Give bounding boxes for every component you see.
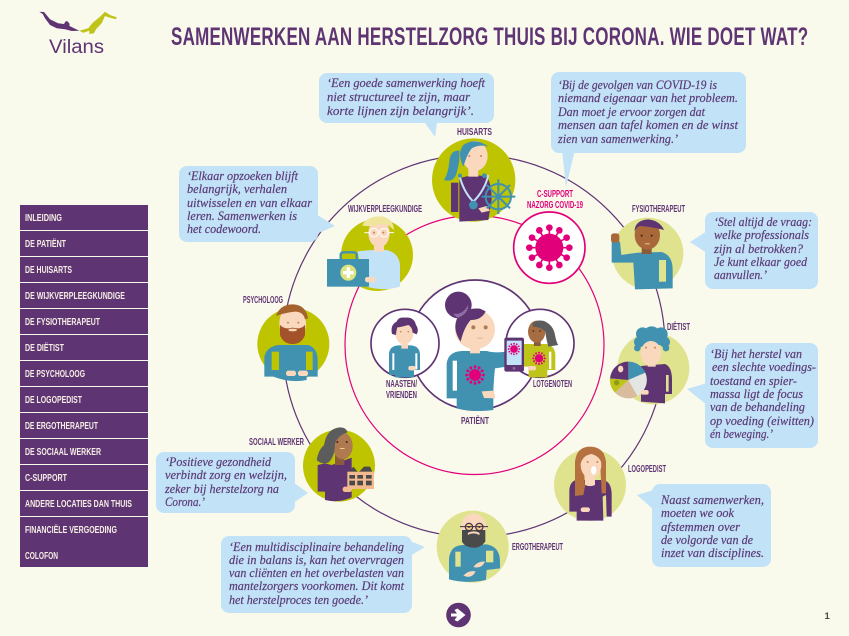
label: fysiotherapeut: FYSIOTHERAPEUT [632, 203, 685, 215]
figure: wijkverpleegkundige [327, 216, 413, 291]
callout: logopedist quote: Naast samenwerken, [660, 492, 764, 507]
page number: 1 [824, 611, 830, 622]
label: c-support [527, 188, 583, 211]
callout: fysiotherapeut quote: aanvullen.’ [714, 267, 767, 282]
callout: logopedist quote [637, 484, 771, 567]
callout: diëtist quote: massa ligt de focus [710, 386, 803, 401]
label: logopedist: LOGOPEDIST [628, 463, 666, 475]
icon: building [347, 467, 374, 489]
navigation menu: DE SOCIAAL WERKER [25, 446, 101, 458]
callout: huisarts quote: ‘Een goede samenwerking hoeft [327, 75, 485, 90]
callout: ergotherapeut quote: ‘Een multidisciplinaire behandeling [229, 539, 404, 554]
label: c-support: C-SUPPORT [537, 188, 573, 200]
callout: diëtist quote: én beweging.’ [710, 426, 773, 441]
callout: c-support quote [551, 72, 746, 187]
navigation menu: DE FYSIOTHERAPEUT [25, 316, 100, 328]
label: psycholoog: PSYCHOLOOG [243, 294, 283, 306]
callout: ergotherapeut quote: van cliënten en het overbelasten van [229, 565, 404, 580]
patient circle [410, 280, 540, 410]
label: patiënt: PATIËNT [461, 414, 489, 427]
callout: ergotherapeut quote [221, 536, 425, 613]
callout: fysiotherapeut quote: welke professionals [714, 227, 809, 242]
figure: lotgenoot [524, 321, 558, 377]
callout: wijkverpleegkundige quote: leren. Samenwerken is [187, 208, 297, 223]
navigation menu: FINANCIËLE VERGOEDING [25, 523, 117, 536]
callout: ergotherapeut quote: het herstelproces ten goede.’ [229, 592, 368, 607]
chart: pie [610, 362, 647, 398]
navigation menu: DE DIËTIST [25, 341, 64, 354]
label: ergotherapeut: ERGOTHERAPEUT [512, 541, 563, 553]
label: lotgenoten: LOTGENOTEN [533, 378, 572, 390]
callout: logopedist quote: afstemmen over [661, 519, 741, 534]
navigation menu [20, 205, 148, 567]
logo: Vilans: Vilans [49, 37, 104, 58]
navigation menu: DE WIJKVERPLEEGKUNDIGE [25, 290, 125, 302]
callout: ergotherapeut quote: mantelzorgers voorkomen. Dit komt [229, 578, 404, 593]
callout: huisarts quote: niet structureel te zijn, maar [327, 89, 471, 104]
navigation menu: C-SUPPORT [25, 472, 67, 484]
callout: logopedist quote: de volgorde van de [661, 532, 753, 547]
callout: ergotherapeut quote: die in balans is, kan het overvragen [229, 552, 404, 567]
label: sociaal werker: SOCIAAL WERKER [249, 436, 304, 448]
callout: wijkverpleegkundige quote: uitwisselen en van elkaar [187, 195, 313, 210]
callout: logopedist quote: inzet van disciplines. [661, 545, 764, 560]
lotgenoten circle [506, 309, 574, 377]
callout: diëtist quote: ‘Bij het herstel van [710, 346, 802, 361]
callout: diëtist quote: een slechte voedings- [712, 359, 816, 374]
label: c-support: NAZORG COVID-19 [527, 199, 583, 211]
callout: sociaal werker quote: verbindt zorg en welzijn, [165, 467, 287, 482]
callout: c-support quote: Dan moet je ervoor zorgen dat [557, 104, 705, 119]
label: naasten/vrienden: NAASTEN/ [386, 378, 417, 390]
callout: sociaal werker quote: ‘Positieve gezondheid [165, 454, 271, 469]
callout: huisarts quote [319, 73, 494, 137]
figure: ergotherapeut [437, 511, 509, 583]
callout: wijkverpleegkundige quote: ‘Elkaar opzoeken blijft [187, 168, 298, 183]
label: naasten/vrienden [386, 378, 417, 401]
callout: diëtist quote: toestand en spier- [710, 373, 797, 388]
navigation menu: INLEIDING [25, 212, 62, 224]
inner ring [345, 216, 604, 474]
callout: c-support quote: niemand eigenaar van het probleem. [558, 90, 738, 105]
label: huisarts: HUISARTS [457, 126, 492, 138]
navigation menu: DE PSYCHOLOOG [25, 368, 85, 380]
patient group [371, 280, 574, 411]
title: SAMENWERKEN AAN HERSTELZORG THUIS BIJ CORONA. WIE DOET WAT? [171, 23, 808, 51]
callout: sociaal werker quote [156, 452, 308, 513]
figure: naaste [389, 317, 420, 377]
label: naasten/vrienden: VRIENDEN [386, 389, 417, 401]
callout: wijkverpleegkundige quote: belangrijk, verhalen [187, 181, 287, 196]
callout: diëtist quote: op voeding (eiwitten) [710, 413, 814, 428]
navigation menu: DE ERGOTHERAPEUT [25, 420, 98, 432]
figure: fysiotherapeut [611, 218, 683, 289]
figure: psycholoog [257, 304, 329, 381]
arrow button [446, 603, 471, 627]
navigation menu: DE PATIËNT [25, 237, 66, 250]
figure: sociaal werker [303, 427, 375, 502]
figure: diëtist [610, 326, 689, 404]
callout: c-support quote: ‘Bij de gevolgen van COVID-19 is [558, 77, 717, 92]
naasten circle [371, 309, 439, 377]
label: diëtist: DIËTIST [667, 320, 690, 333]
callout: wijkverpleegkundige quote: het codewoord. [187, 221, 261, 236]
navigation menu: DE LOGOPEDIST [25, 394, 82, 406]
icon: ship's wheel [482, 179, 515, 214]
callout: wijkverpleegkundige quote [179, 166, 335, 242]
callout: fysiotherapeut quote: Je kunt elkaar goed [714, 254, 807, 269]
callout: huisarts quote: korte lijnen zijn belangrijk’. [327, 103, 474, 118]
callout: fysiotherapeut quote [690, 212, 818, 289]
figure: huisarts [432, 138, 515, 222]
navigation menu: COLOFON [25, 550, 58, 562]
label: wijkverpleegkundige: WIJKVERPLEEGKUNDIGE [348, 203, 422, 215]
icon: virus [526, 224, 573, 271]
callout: diëtist quote [687, 343, 818, 448]
navigation menu: DE HUISARTS [25, 264, 72, 276]
callout: fysiotherapeut quote: zijn al betrokken? [713, 241, 803, 256]
outer ring [283, 155, 665, 537]
callout: c-support quote: zien van samenwerking.’ [557, 131, 678, 146]
logo: Vilans [39, 12, 117, 58]
callout: c-support quote: mensen aan tafel komen en de winst [558, 117, 738, 132]
figure: patiënt [445, 292, 524, 411]
navigation menu: ANDERE LOCATIES DAN THUIS [25, 498, 132, 510]
figure: logopedist [554, 447, 626, 521]
callout: fysiotherapeut quote: ‘Stel altijd de vraag: [714, 214, 812, 229]
callout: sociaal werker quote: zeker bij herstelzorg na [164, 481, 279, 496]
c-support circle [514, 212, 585, 283]
callout: diëtist quote: van de behandeling [710, 399, 805, 414]
callout: sociaal werker quote: Corona.’ [165, 494, 205, 509]
callout: logopedist quote: moeten we ook [661, 505, 734, 520]
